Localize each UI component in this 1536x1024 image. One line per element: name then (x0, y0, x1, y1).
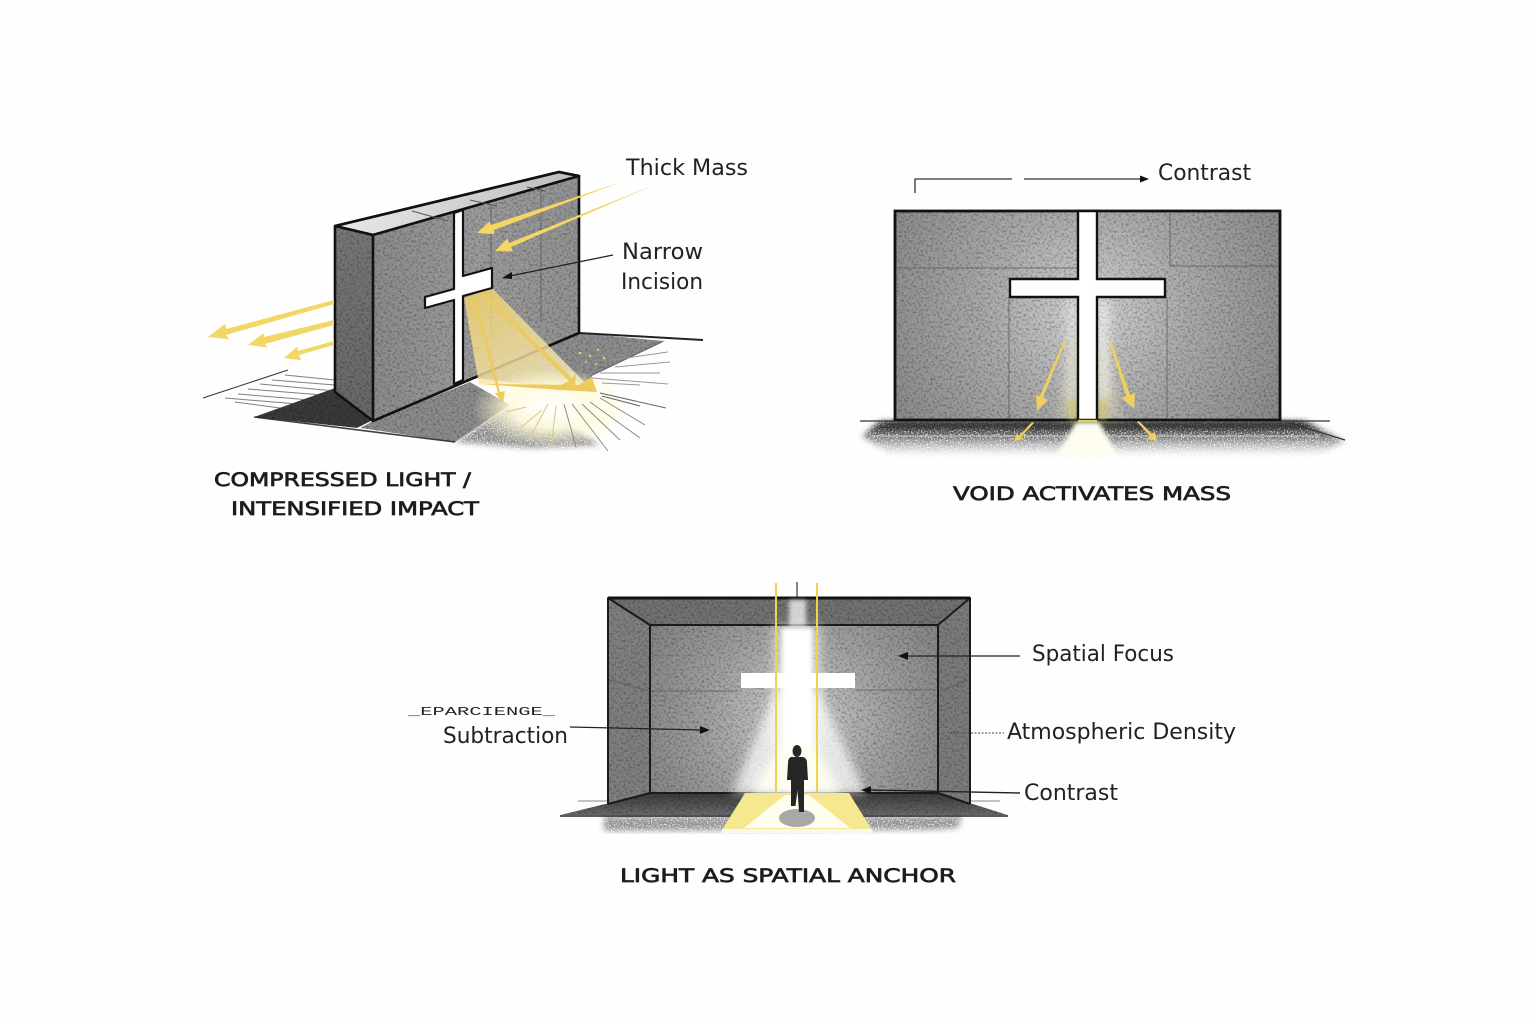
light burst glow (472, 368, 632, 448)
label: contrast: Contrast (1158, 161, 1251, 186)
wall glow (1058, 300, 1122, 420)
yellow arrows (1014, 340, 1157, 441)
room: ceiling (608, 598, 970, 625)
heading: void activates mass: VOID ACTIVATES MASS (953, 483, 1231, 505)
light shaft (732, 600, 866, 793)
room outline (608, 598, 970, 804)
beam arrows (472, 292, 597, 403)
label: contrast: Contrast (1024, 781, 1118, 806)
panel: light as spatial anchor diagram (406, 582, 1236, 887)
wall: side face (335, 226, 373, 421)
floor light (722, 793, 872, 833)
light beam (464, 288, 594, 392)
floor (860, 421, 1345, 454)
cross arm (741, 673, 855, 688)
arrows: incoming light (477, 182, 654, 252)
heading: compressed light (214, 469, 479, 520)
figure shadow (779, 809, 815, 827)
panel seams (897, 213, 1279, 418)
wall outline (895, 211, 1280, 420)
room: back wall (650, 625, 938, 793)
concrete wall (895, 211, 1280, 420)
heading: compressed light: COMPRESSED LIGHT / (214, 469, 472, 491)
contrast bracket arrow (915, 176, 1149, 193)
wall outline (335, 172, 579, 421)
floor glow (1056, 422, 1118, 456)
person figure (787, 745, 808, 812)
wall: top face (335, 172, 579, 235)
room: right wall (938, 598, 970, 804)
label: contrast (861, 781, 1118, 806)
burst rays (506, 352, 670, 451)
floor (254, 333, 703, 448)
yellow light lines (776, 583, 817, 792)
label: spatial focus: Spatial Focus (1032, 642, 1174, 667)
hatched ground left (203, 370, 335, 408)
cross opening (1010, 211, 1165, 420)
top tick (796, 582, 798, 597)
label: subtraction: Subtraction (443, 724, 568, 749)
label: narrow incision: Incision (621, 270, 703, 295)
yellow specks (579, 349, 605, 365)
garbled label: _EPARCIENGE_ (406, 705, 556, 719)
panel: void activates mass diagram (860, 161, 1345, 505)
cross opening (425, 210, 492, 384)
label: narrow incision: Narrow (622, 240, 703, 265)
ground shadow (254, 388, 373, 428)
label: spatial focus (898, 642, 1174, 667)
floor (560, 793, 1008, 831)
label: narrow incision (502, 240, 703, 295)
panel: compressed light diagram (203, 156, 748, 520)
floor yellow edge glow (1072, 398, 1103, 420)
label: subtraction (443, 724, 710, 749)
label: thick mass: Thick Mass (625, 156, 748, 181)
heading: compressed light: INTENSIFIED IMPACT (231, 498, 479, 520)
room: left wall (608, 598, 650, 804)
wall: front face (373, 176, 579, 421)
label: atmospheric density: Atmospheric Density (1007, 720, 1236, 745)
arrows leaving wall (208, 300, 334, 360)
heading: light as spatial anchor: LIGHT AS SPATIAL ANCHOR (620, 865, 956, 887)
